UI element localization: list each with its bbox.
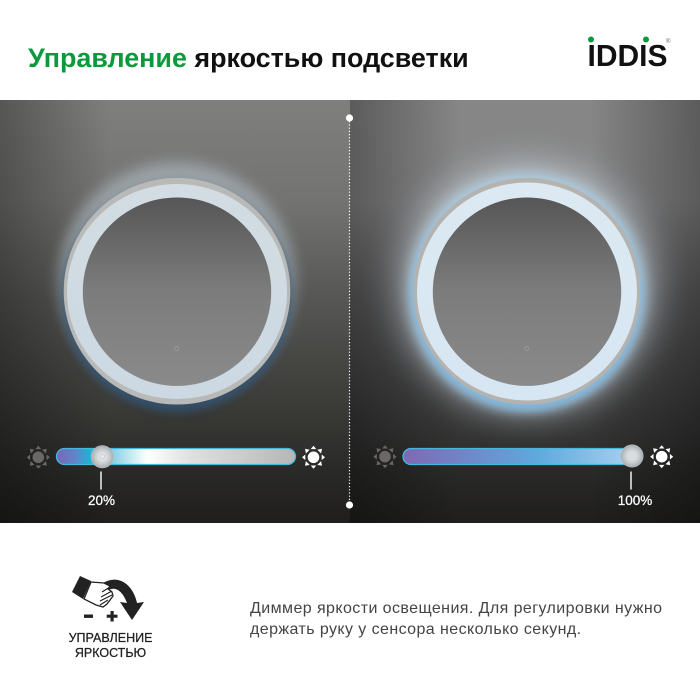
label: управление яркостью: ЯРКОСТЬЮ	[75, 646, 146, 660]
icon: bright sun	[302, 446, 325, 469]
photo panel: brightness comparison	[0, 100, 700, 523]
description text: Диммер яркости освещения. Для регулировки нужно	[250, 600, 662, 617]
slider knob left	[91, 445, 114, 468]
logo: IDDIS: ®	[666, 38, 671, 45]
dotted divider	[346, 114, 353, 509]
slider track right	[403, 448, 635, 464]
label: управление яркостью: УПРАВЛЕНИЕ	[69, 630, 152, 644]
slider track left	[56, 448, 296, 464]
icon: dim sun right	[374, 445, 396, 468]
slider: 100%	[374, 444, 673, 508]
wall: right	[350, 100, 700, 523]
icon: hand gesture with arrow	[72, 576, 144, 622]
logo: IDDIS: IDDIS	[588, 38, 668, 72]
label: управление яркостью	[68, 630, 152, 660]
mirror: bright right	[403, 164, 651, 412]
icon: bright sun right	[650, 445, 673, 468]
description text: держать руку у сенсора несколько секунд.	[250, 621, 582, 638]
slider: 20%	[27, 445, 325, 508]
wall: left	[0, 100, 350, 523]
slider knob right	[620, 444, 644, 468]
description text	[250, 600, 662, 638]
label 100%: 100%	[618, 493, 652, 508]
label 20%: 20%	[88, 493, 115, 508]
icon: dim sun	[27, 446, 50, 469]
title: Управление яркостью подсветки	[28, 43, 469, 73]
mirror: dim left	[59, 162, 295, 412]
